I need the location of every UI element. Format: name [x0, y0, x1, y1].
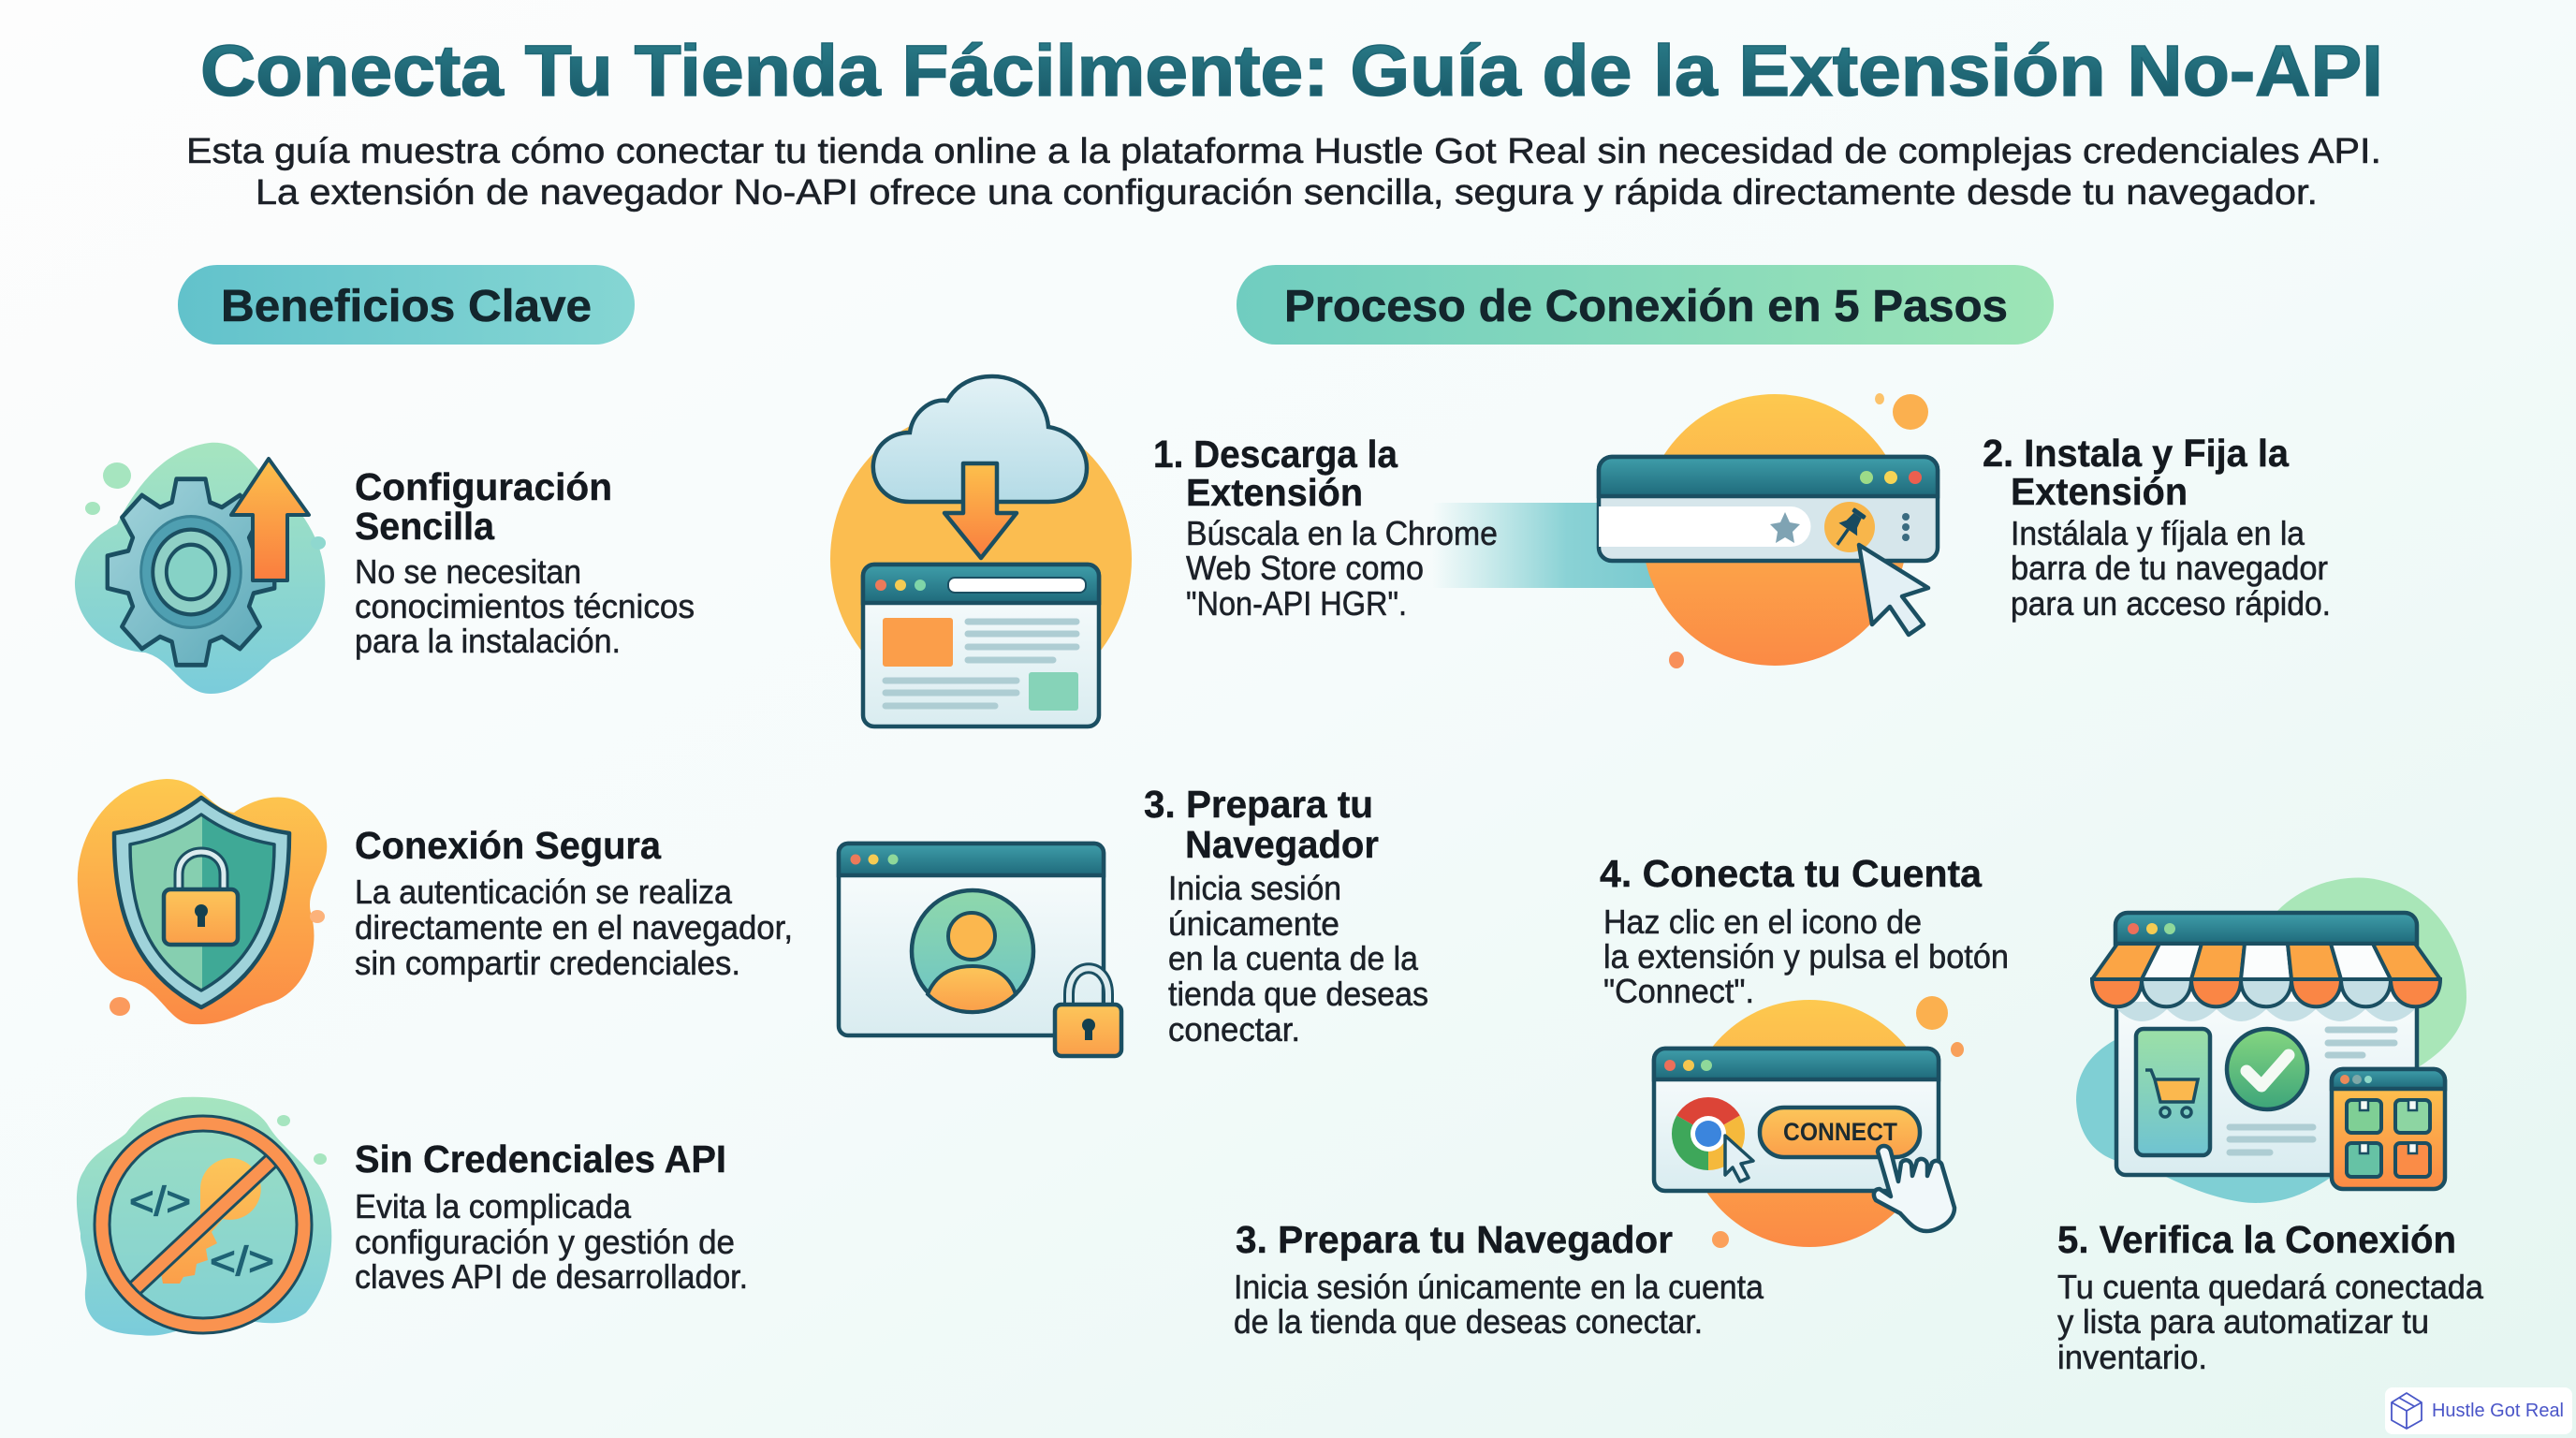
text: step 5: 5. Verifica la Conexión [2057, 1218, 2456, 1261]
heading pill: beneficios clave: Beneficios Clave [221, 282, 592, 331]
icon: step 3 browser login [839, 844, 1121, 1056]
text: configuración sencilla: Sencilla [355, 505, 495, 548]
text: step 2: para un acceso rápido. [2011, 584, 2331, 623]
text: sin credenciales API: configuración y gestión de [355, 1223, 735, 1261]
icon: no API keys: </> [210, 1239, 274, 1284]
text: step 2: 2. Instala y Fija la [1983, 432, 2290, 475]
text: step 3 column: en la cuenta de la [1168, 939, 1419, 977]
text: configuración sencilla: No se necesitan [355, 552, 581, 591]
icon: step 2 pin extension [1599, 393, 1938, 668]
text: step 3 duplicate: Inicia sesión únicamente en la cuenta [1234, 1268, 1764, 1306]
text: conexión segura: Conexión Segura [355, 824, 662, 867]
heading pill: proceso de conexión [1237, 265, 2054, 345]
text: step 5 [2057, 1218, 2484, 1376]
badge: Hustle Got Real [2385, 1387, 2572, 1434]
text: step 5: y lista para automatizar tu [2057, 1302, 2429, 1341]
text: step 3 duplicate: 3. Prepara tu Navegador [1236, 1218, 1673, 1261]
text: step 1: 1. Descarga la [1153, 433, 1398, 476]
text: step 1: "Non-API HGR". [1186, 584, 1407, 623]
intro text: Esta guía muestra cómo conectar tu tienda online a la plataforma Hustle Got Real sin necesidad de complejas credenciales API. [186, 132, 2381, 171]
text: step 5: Tu cuenta quedará conectada [2057, 1268, 2484, 1306]
text: step 3 duplicate [1234, 1218, 1764, 1341]
icon: shield with lock [78, 779, 327, 1024]
icon: step 5 store verified [2076, 877, 2466, 1203]
title: Conecta Tu Tienda Fácilmente: Guía de la Extensión No-API [200, 31, 2383, 111]
intro text: La extensión de navegador No-API ofrece una configuración sencilla, segura y rápida directamente desde tu navegador. [256, 173, 2318, 213]
text: configuración sencilla: Configuración [355, 465, 612, 508]
heading pill: beneficios clave [178, 265, 635, 345]
text: step 1 [1153, 433, 1498, 623]
text: step 4: la extensión y pulsa el botón [1603, 937, 2009, 976]
icon: step 4 connect button [1654, 996, 1964, 1248]
text: conexión segura: directamente en el navegador, [355, 908, 793, 946]
text: sin credenciales API: claves API de desarrollador. [355, 1257, 748, 1296]
text: step 2: barra de tu navegador [2011, 549, 2328, 587]
text: step 4: "Connect". [1603, 972, 1754, 1010]
text: step 1: Web Store como [1186, 549, 1424, 587]
icon: step 4 connect button: CONNECT [1783, 1118, 1897, 1146]
badge: Hustle Got Real: Hustle Got Real [2432, 1401, 2564, 1421]
text: step 3 column: únicamente [1168, 904, 1339, 943]
text: configuración sencilla [355, 465, 695, 660]
text: step 2 [1983, 432, 2331, 623]
arrow band: step 1 to step 2 [1432, 503, 1657, 588]
icon: no API keys [77, 1097, 331, 1336]
text: step 4 [1600, 852, 2009, 1010]
text: step 1: Búscala en la Chrome [1186, 514, 1498, 552]
text: step 4: 4. Conecta tu Cuenta [1600, 852, 1983, 895]
icon: gear with up arrow [75, 443, 326, 694]
text: step 3 column [1144, 783, 1428, 1049]
text: step 2: Extensión [2011, 470, 2188, 513]
heading pill: proceso de conexión: Proceso de Conexión en 5 Pasos [1284, 282, 2008, 331]
text: conexión segura [355, 824, 793, 982]
intro text [186, 132, 2381, 213]
icon: step 1 cloud download [830, 376, 1132, 726]
text: step 3 duplicate: de la tienda que deseas conectar. [1234, 1302, 1703, 1341]
text: sin credenciales API [355, 1137, 748, 1296]
text: step 2: Instálala y fíjala en la [2011, 514, 2305, 552]
text: sin credenciales API: Evita la complicada [355, 1187, 632, 1225]
text: configuración sencilla: para la instalación. [355, 622, 621, 660]
text: sin credenciales API: Sin Credenciales API [355, 1137, 726, 1181]
icon: no API keys: </> [129, 1179, 191, 1225]
text: step 4: Haz clic en el icono de [1603, 902, 1922, 941]
text: conexión segura: La autenticación se realiza [355, 873, 733, 911]
text: conexión segura: sin compartir credenciales. [355, 944, 740, 982]
text: step 3 column: Navegador [1185, 823, 1379, 866]
text: configuración sencilla: conocimientos técnicos [355, 587, 695, 625]
text: step 3 column: Inicia sesión [1168, 869, 1341, 907]
text: step 5: inventario. [2057, 1338, 2207, 1376]
text: step 3 column: tienda que deseas [1168, 975, 1428, 1013]
text: step 3 column: conectar. [1168, 1010, 1300, 1049]
text: step 1: Extensión [1186, 471, 1363, 514]
text: step 3 column: 3. Prepara tu [1144, 783, 1373, 826]
